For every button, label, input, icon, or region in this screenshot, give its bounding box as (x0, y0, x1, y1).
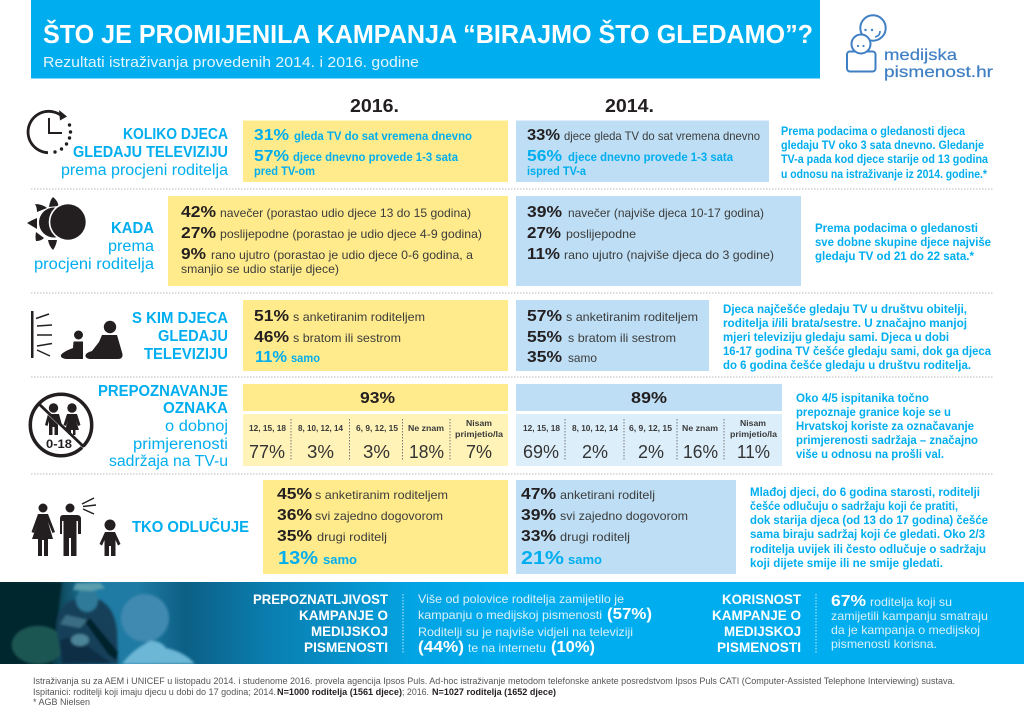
panel: row 1, 2014: 56% (527, 148, 562, 165)
note: row 2: sve dobne skupine djece najviše (815, 237, 991, 249)
year heading 2016: 2016. (350, 95, 399, 116)
panel: row 4, 2014: Nisam (740, 418, 766, 428)
panel: row 4, 2016: 77% (249, 442, 285, 462)
logo: medijska pismenost.hr: pismenost.hr (884, 64, 994, 81)
note: row 5: roditelja uvijek ili često odlučuje o sadržaju (750, 544, 986, 556)
panel: row 1, 2016: 57% (254, 148, 289, 165)
panel: row 2, 2016: smanjio se udio starije djece) (181, 262, 339, 276)
note: row 4: prepoznaje granice koje se u (796, 407, 951, 419)
panel: row 2, 2014: poslijepodne (566, 227, 636, 241)
panel: row 4, 2016: 12, 15, 18 (249, 423, 286, 433)
note: row 5: Mlađoj djeci, do 6 godina starosti, roditelji (750, 487, 980, 499)
panel: row 3, 2016: s bratom ili sestrom (293, 331, 401, 345)
note: row 5: sama biraju sadržaj koji će gledati. Oko 2/3 (750, 529, 985, 541)
panel: row 4, 2014: 2% (638, 442, 664, 462)
row 2 label: prema (108, 238, 154, 255)
campaign usefulness text (831, 593, 988, 651)
panel: row 3, 2016: 51% (254, 308, 289, 325)
note: row 1 (781, 126, 989, 181)
panel: row 5, 2014: 39% (521, 507, 556, 524)
logo: medijska pismenost.hr (847, 15, 994, 81)
panel: row 2, 2016: navečer (porastao udio djece 13 do 15 godina) (220, 206, 471, 220)
panel: row 5, 2016: samo (323, 552, 357, 567)
panel: row 3, 2014 (516, 300, 709, 371)
row 2 label (34, 220, 154, 273)
panel: row 4, 2014: 2% (582, 442, 608, 462)
panel: row 4, 2014: 6, 9, 12, 15 (629, 423, 672, 433)
note: row 4: više u odnosu na prošli val. (796, 449, 944, 461)
panel: row 5, 2016: 45% (277, 486, 312, 503)
icon: family (32, 498, 120, 556)
note: row 4 (796, 393, 978, 461)
note: row 5: dok starija djeca (od 13 do 17 godina) češće (750, 515, 988, 527)
row 3 label: TELEVIZIJU (144, 346, 228, 363)
note: row 1: gledaju TV oko 3 sata dnevno. Gledanje (781, 140, 984, 152)
note: row 1: Prema podacima o gledanosti djeca (781, 126, 966, 138)
panel: row 5, 2016: drugi roditelj (317, 530, 387, 544)
campaign usefulness text: pismenosti korisna. (831, 637, 937, 651)
panel: row 4, 2014: 11% (737, 442, 770, 462)
panel: row 4, 2014: 89% (631, 390, 667, 407)
panel: row 3, 2014: s bratom ili sestrom (568, 331, 676, 345)
note: row 3: 16-17 godina TV češće gledaju sami, dok ga djeca (723, 346, 992, 358)
panel: row 3, 2014: 57% (527, 308, 562, 325)
panel: row 1, 2016: 31% (254, 127, 289, 144)
note: row 1: TV-a pada kod djece starije od 13 godina (781, 154, 989, 166)
note: row 3: mjeri televiziju gledaju sami. Djeca u dobi (723, 332, 949, 344)
panel: row 5, 2014: 33% (521, 528, 556, 545)
note: row 1: u odnosu na istraživanje iz 2014. godine.* (781, 169, 987, 181)
panel: row 1, 2014 (516, 120, 769, 182)
campaign recognition text: kampanju o medijskoj pismenosti (418, 608, 602, 622)
panel: row 5, 2014: 47% (521, 486, 556, 503)
panel: row 4, 2016: 8, 10, 12, 14 (298, 423, 343, 433)
note: row 4: Hrvatskoj koriste za označavanje (796, 421, 974, 433)
panel: row 1, 2014: 33% (527, 127, 560, 144)
note: row 3: do 6 godina češće gledaju u društvu roditelja. (723, 360, 971, 372)
note: row 4: Oko 4/5 ispitanika točno (796, 393, 929, 405)
panel: row 1, 2016: gleda TV do sat vremena dnevno (294, 131, 472, 143)
campaign usefulness text: 67% (831, 593, 866, 610)
row 4 label: primjerenosti (133, 436, 228, 453)
note: row 2 (815, 223, 991, 263)
row 4 label: OZNAKA (163, 400, 228, 417)
panel: row 2, 2014: 39% (527, 204, 562, 221)
panel: row 4, 2016: primjetio/la (455, 429, 503, 439)
row 1 label: prema procjeni roditelja (61, 162, 228, 179)
icon: clock (28, 110, 72, 154)
note: row 5: češće odlučuju o sadržaju koji će pratiti, (750, 501, 958, 513)
campaign recognition heading (253, 592, 389, 655)
campaign recognition text: te na internetu (468, 641, 546, 655)
panel: row 2, 2016: 27% (181, 225, 216, 242)
row 4 label (98, 383, 228, 470)
panel: row 4, 2016: 3% (363, 442, 390, 462)
campaign recognition text (418, 592, 652, 656)
campaign usefulness text: zamijetili kampanju smatraju (831, 609, 988, 623)
campaign recognition heading: PREPOZNATLJIVOST (253, 592, 389, 607)
panel: row 5, 2016: svi zajedno dogovorom (315, 509, 443, 523)
panel: row 2, 2014 (516, 196, 801, 286)
panel: row 5, 2014: anketirani roditelj (560, 488, 655, 502)
header banner (31, 0, 820, 78)
panel: row 3, 2014: 55% (527, 329, 562, 346)
row 3 label: S KIM DJECA (132, 310, 228, 327)
campaign usefulness text: da je kampanja o medijskoj (831, 623, 980, 637)
icon: age rating 0-18: 0-18 (46, 439, 73, 451)
campaign recognition text: Roditelji su je najviše vidjeli na televiziji (418, 625, 633, 639)
note: row 5 (750, 487, 988, 570)
panel: row 2, 2016 (168, 196, 508, 286)
row 4 label: o dobnoj (165, 418, 228, 435)
panel: row 3, 2016: 46% (254, 329, 289, 346)
panel: row 2, 2014: rano ujutro (najviše djeca do 3 godine) (564, 248, 774, 262)
campaign usefulness heading: KORISNOST (722, 592, 802, 607)
panel: row 4, 2016: Nisam (466, 418, 492, 428)
footer notes: Istraživanja su za AEM i UNICEF u listopadu 2014. i studenome 2016. provela agencija Ipsos Puls. Ad-hoc istraživanje metodom telefonske ankete posredstvom Ipsos Puls CATI (Computer-Assisted Telephone Interviewing) sustava. (33, 676, 955, 686)
panel: row 4, 2014: primjetio/la (730, 429, 777, 439)
footer notes: Ispitanici: roditelji koji imaju djecu u dobi do 17 godina; 2014. (33, 687, 276, 697)
campaign recognition heading: MEDIJSKOJ (311, 624, 388, 639)
panel: row 2, 2016: 9% (181, 246, 206, 263)
campaign recognition text: Više od polovice roditelja zamijetilo je (418, 592, 624, 606)
subtitle: Rezultati istraživanja provedenih 2014. i 2016. godine (43, 55, 419, 71)
campaign recognition heading: PISMENOSTI (304, 640, 388, 655)
campaign usefulness text: roditelja koji su (870, 595, 952, 609)
panel: row 2, 2016: 42% (181, 204, 216, 221)
footer notes: N=1027 roditelja (1652 djece) (432, 687, 556, 697)
campaign usefulness heading: PISMENOSTI (717, 640, 801, 655)
campaign usefulness heading: KAMPANJE O (712, 608, 801, 623)
row 3 label (132, 310, 228, 363)
panel: row 3, 2014: s anketiranim roditeljem (566, 310, 698, 324)
panel: row 4, 2014: 16% (683, 442, 718, 462)
panel: row 2, 2016: poslijepodne (porastao je udio djece 4-9 godina) (220, 227, 482, 241)
campaign recognition text: (44%) (418, 639, 464, 656)
panel: row 2, 2016: rano ujutro (porastao je udio djece 0-6 godina, a (211, 248, 473, 262)
panel: row 5, 2014: svi zajedno dogovorom (560, 509, 688, 523)
title: ŠTO JE PROMIJENILA KAMPANJA “BIRAJMO ŠTO GLEDAMO”? (43, 19, 813, 49)
campaign usefulness heading (712, 592, 802, 655)
note: row 3: roditelja i/ili brata/sestre. U značajno manjoj (723, 318, 967, 330)
panel: row 3, 2016 (243, 300, 508, 371)
row 4 label: sadržaja na TV-u (109, 453, 228, 470)
panel: row 5, 2016: 35% (277, 528, 312, 545)
panel: row 4, 2016: Ne znam (408, 423, 444, 433)
panel: row 5, 2014: 21% (521, 547, 564, 568)
panel: row 4, 2016 (243, 384, 508, 466)
note: row 4: primjerenosti sadržaja – značajno (796, 435, 978, 447)
panel: row 5, 2014: samo (568, 552, 602, 567)
icon: sun and moon (27, 197, 87, 250)
row 5 label: TKO ODLUČUJE (132, 518, 249, 536)
note: row 2: Prema podacima o gledanosti (815, 223, 978, 235)
panel: row 4, 2016: 3% (307, 442, 334, 462)
panel: row 3, 2016: 11% (255, 349, 287, 366)
panel: row 4, 2014: 8, 10, 12, 14 (572, 423, 618, 433)
year heading 2014: 2014. (605, 95, 654, 116)
panel: row 2, 2014: navečer (najviše djeca 10-17 godina) (568, 206, 764, 220)
panel: row 3, 2014: 35% (527, 349, 562, 366)
panel: row 3, 2016: s anketiranim roditeljem (293, 310, 425, 324)
panel: row 4, 2016: 93% (360, 390, 395, 407)
panel: row 5, 2016 (263, 480, 508, 574)
footer notes: ; 2016. (402, 687, 429, 697)
icon: TV and viewers (31, 311, 123, 359)
panel: row 4, 2014: 69% (523, 442, 559, 462)
row 2 label: KADA (111, 220, 154, 237)
panel: row 4, 2016: 6, 9, 12, 15 (356, 423, 398, 433)
note: row 5: koji dijete smije ili ne smije gledati. (750, 558, 943, 570)
panel: row 2, 2014: 27% (527, 225, 561, 242)
panel: row 1, 2016: djece dnevno provede 1-3 sata (293, 152, 459, 164)
panel: row 1, 2014: ispred TV-a (527, 166, 587, 178)
panel: row 4, 2014 (516, 384, 782, 466)
bottom band (0, 582, 1024, 664)
panel: row 1, 2014: djece gleda TV do sat vremena dnevno (564, 129, 760, 143)
panel: row 1, 2014: djece dnevno provede 1-3 sata (568, 152, 734, 164)
note: row 3 (723, 304, 992, 372)
row 4 label: PREPOZNAVANJE (98, 383, 228, 400)
panel: row 4, 2016: 7% (466, 442, 492, 462)
panel: row 2, 2014: 11% (527, 246, 560, 263)
campaign recognition heading: KAMPANJE O (299, 608, 388, 623)
footer notes: * AGB Nielsen (33, 697, 90, 707)
note: row 3: Djeca najčešće gledaju TV u društvu obitelji, (723, 304, 967, 316)
photo: children playing outdoors (0, 582, 195, 664)
panel: row 5, 2016: s anketiranim roditeljem (315, 488, 448, 502)
panel: row 1, 2016: pred TV-om (254, 166, 315, 178)
panel: row 5, 2014 (516, 480, 736, 574)
footer notes: N=1000 roditelja (1561 djece) (277, 687, 402, 697)
logo: medijska pismenost.hr: medijska (884, 47, 957, 64)
panel: row 3, 2016: samo (291, 353, 320, 365)
row 1 label (61, 126, 228, 179)
panel: row 5, 2014: drugi roditelj (560, 530, 630, 544)
footer notes (33, 676, 955, 707)
icon: age rating 0-18 (30, 394, 92, 456)
campaign usefulness heading: MEDIJSKOJ (724, 624, 801, 639)
row 1 label: KOLIKO DJECA (123, 126, 228, 143)
panel: row 5, 2016: 36% (277, 507, 312, 524)
panel: row 4, 2016: 18% (409, 442, 444, 462)
panel: row 3, 2014: samo (568, 351, 597, 365)
panel: row 5, 2016: 13% (278, 547, 318, 568)
campaign recognition text: (57%) (607, 606, 652, 623)
row 2 label: procjeni roditelja (34, 256, 154, 273)
campaign recognition text: (10%) (551, 639, 595, 656)
panel: row 4, 2014: 12, 15, 18 (523, 423, 560, 433)
row 3 label: GLEDAJU (158, 328, 228, 345)
note: row 2: gledaju TV od 21 do 22 sata.* (815, 251, 975, 263)
panel: row 4, 2014: Ne znam (682, 423, 718, 433)
panel: row 1, 2016 (243, 120, 508, 182)
row 1 label: GLEDAJU TELEVIZIJU (73, 144, 228, 161)
